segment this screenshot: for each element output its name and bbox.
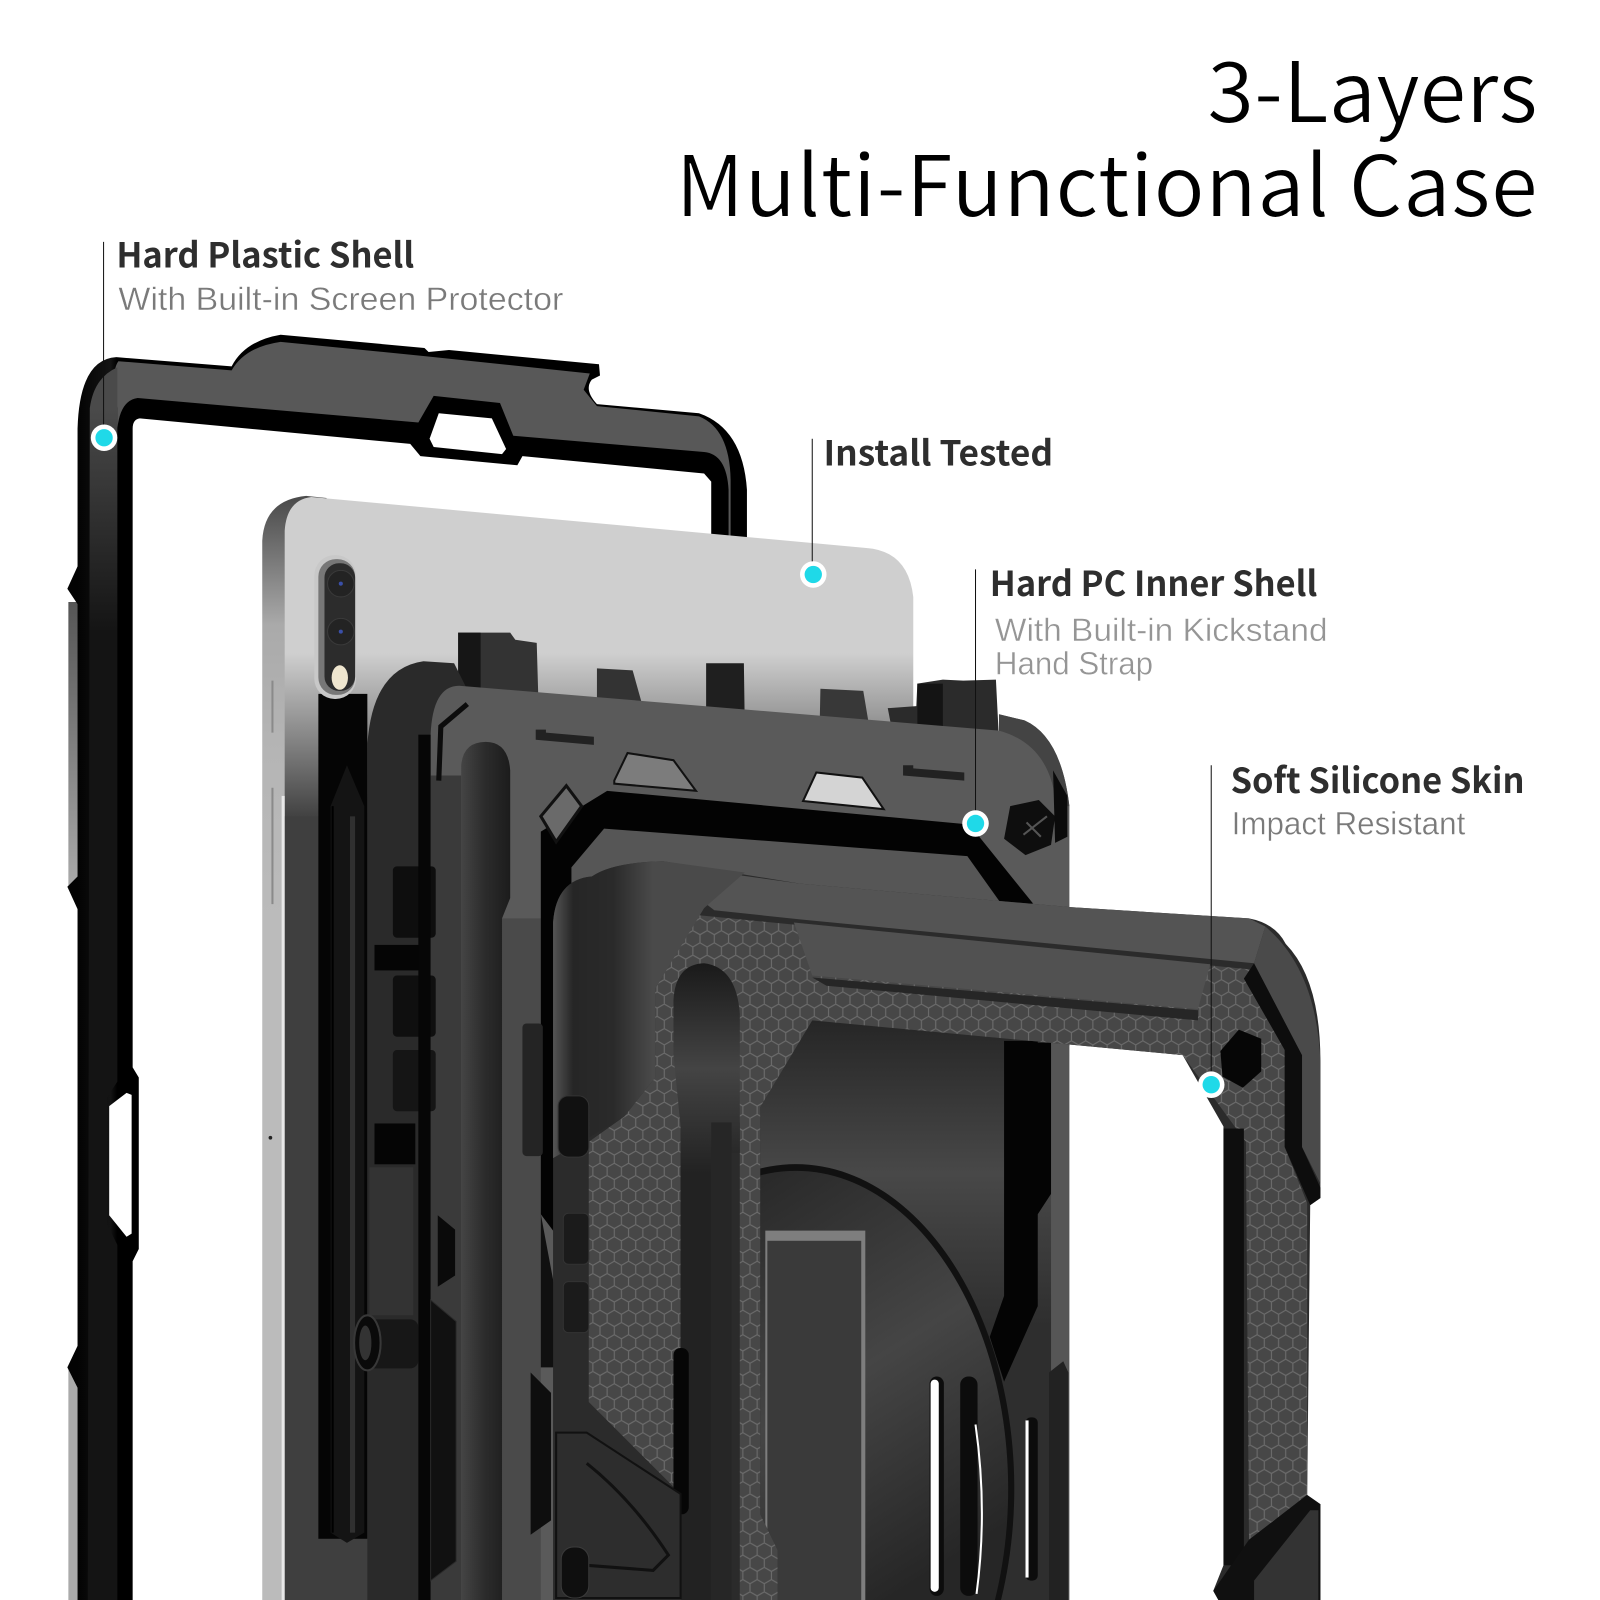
black gap <box>990 1041 1051 1382</box>
white right gap <box>1069 1046 1223 1600</box>
shell slots <box>536 730 964 809</box>
disc slots <box>930 1377 982 1596</box>
shell left column <box>431 776 461 1600</box>
shell window black <box>541 791 1033 1255</box>
shell corner hex nut <box>1004 800 1055 855</box>
shell main face <box>431 686 1069 1600</box>
tablet back surface <box>285 497 913 1600</box>
skin left smooth bumper <box>553 861 745 1158</box>
label: hard PC inner shell: Hand Strap <box>995 644 1153 681</box>
tablet silver rim <box>262 496 327 1600</box>
rotating disc <box>578 1164 1014 1600</box>
label: hard plastic shell: With Built-in Screen Protector <box>118 280 563 317</box>
shell hook slot <box>439 704 467 781</box>
skin inner right shade <box>1223 1129 1244 1565</box>
label: soft silicone skin: Soft Silicone Skin <box>1231 753 1524 803</box>
shell connectors <box>369 735 436 1600</box>
callout: hard plastic shell leader <box>91 242 117 451</box>
label: soft silicone skin: Impact Resistant <box>1232 805 1465 842</box>
callout: soft silicone skin leader <box>1198 765 1224 1098</box>
tablet rim highlight <box>282 796 285 1600</box>
right slot <box>1026 1361 1068 1600</box>
skin side buttons <box>558 1096 589 1598</box>
opening interior <box>673 1020 1069 1600</box>
layer: hard PC inner shell <box>354 633 1069 1600</box>
shell diagonal corner clip <box>541 786 582 842</box>
stylus pen <box>331 765 364 1543</box>
layer: hard plastic shell frame <box>67 335 747 1600</box>
kickstand <box>765 1231 865 1600</box>
shell pegs <box>458 633 999 740</box>
title <box>676 25 1538 241</box>
label: install tested: Install Tested <box>823 425 1053 475</box>
shell black side band <box>541 1214 556 1367</box>
shell capsule <box>461 742 510 1600</box>
layer: soft silicone skin <box>553 861 1320 1600</box>
shell inner gray panel <box>571 829 1000 918</box>
right side shell strip <box>1051 1020 1069 1600</box>
shell back bumper <box>367 661 480 1600</box>
shell round port <box>354 1315 418 1370</box>
label: hard PC inner shell: With Built-in Kickstand <box>995 611 1328 648</box>
skin strap ridge <box>711 1122 732 1600</box>
label: hard plastic shell <box>116 227 563 317</box>
tablet lower back <box>285 816 377 1600</box>
skin corner rim <box>1244 963 1320 1205</box>
shell side bar <box>522 1023 543 1156</box>
disc shadow arc <box>682 1158 745 1224</box>
frame top opening <box>430 413 506 454</box>
skin honeycomb texture <box>589 915 1307 1600</box>
skin smooth raised bar <box>794 922 1210 1009</box>
skin slot interior <box>673 963 740 1600</box>
pen channel <box>318 694 367 1539</box>
shell lower slots <box>431 1215 456 1581</box>
skin corner outer <box>1254 927 1320 1184</box>
label: hard plastic shell: Hard Plastic Shell <box>116 227 414 277</box>
title: 3-Layers <box>1207 25 1538 147</box>
layer: tablet <box>262 496 913 1600</box>
callout: install tested leader <box>800 439 827 588</box>
frame left face shade <box>88 367 117 1600</box>
skin bar dark line <box>812 978 1198 1020</box>
shell top edge dark <box>999 714 1069 806</box>
frame top gray surface <box>114 342 731 546</box>
label: hard PC inner shell: Hard PC Inner Shell <box>990 556 1317 606</box>
frame side opening <box>109 1093 132 1237</box>
shell lower bar <box>531 1372 551 1535</box>
skin bottom right slab <box>1213 1495 1320 1600</box>
callout: hard PC inner shell leader <box>962 569 989 837</box>
label: soft silicone skin <box>1231 753 1524 842</box>
camera module <box>314 555 356 699</box>
skin lower left bumper <box>556 1433 681 1598</box>
skin slot black bar <box>673 1348 689 1514</box>
shell right corner slot <box>1053 770 1067 843</box>
shell face lower shade <box>502 918 541 1600</box>
tablet side buttons <box>271 681 273 904</box>
frame silver side edge <box>68 602 80 1600</box>
skin frame silhouette <box>553 861 1320 1600</box>
frame outer silhouette <box>67 335 747 1600</box>
skin corner hex hole <box>1220 1030 1261 1088</box>
label: hard PC inner shell <box>990 556 1328 681</box>
title: Multi-Functional Case <box>676 119 1538 241</box>
skin top surface <box>653 863 1265 963</box>
tablet mic dot <box>269 1136 272 1140</box>
